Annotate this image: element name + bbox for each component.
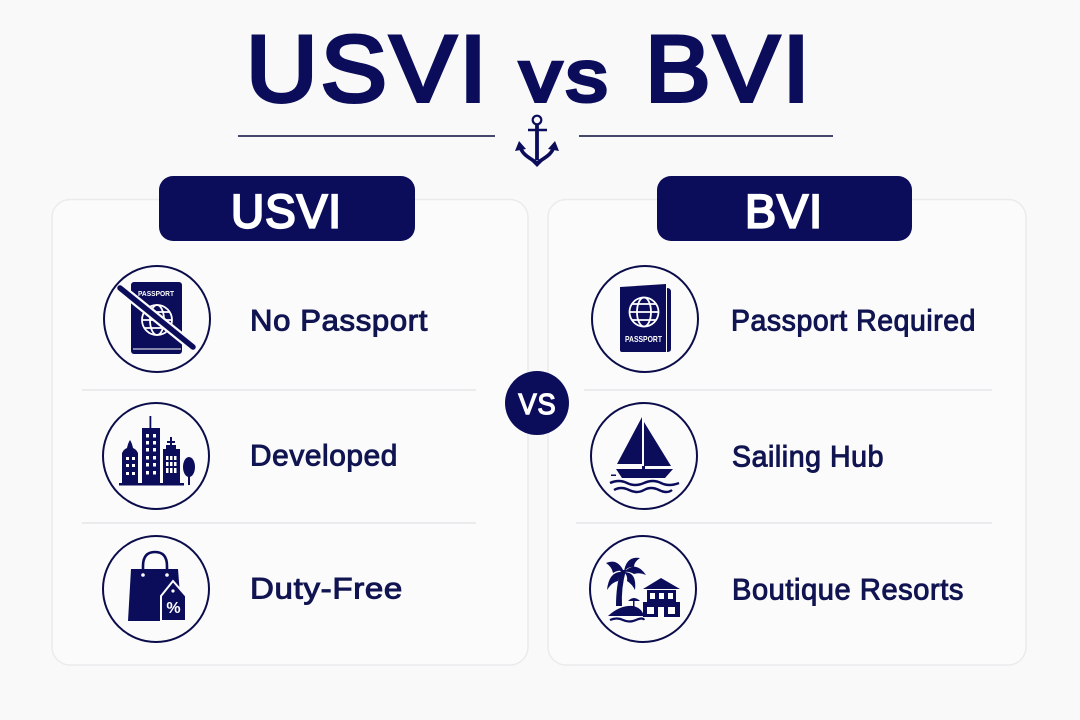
- label: No Passport: No Passport: [250, 304, 428, 338]
- USVI header pill: USVI: [231, 184, 342, 238]
- label: Duty-Free: Duty-Free: [250, 572, 403, 606]
- panel: BVI: [548, 176, 1026, 665]
- VS badge: [505, 371, 569, 435]
- icon: city buildings: [103, 403, 209, 509]
- title: BVI: [645, 16, 813, 121]
- icon: palm island and resort: [590, 536, 696, 642]
- label: Boutique Resorts: Boutique Resorts: [732, 574, 964, 606]
- label: Passport Required: Passport Required: [731, 304, 976, 338]
- title: USVI: [246, 16, 490, 121]
- label: Developed: Developed: [250, 440, 398, 472]
- icon: crossed-out passport: PASSPORT: [138, 289, 174, 298]
- BVI header pill: BVI: [745, 184, 823, 238]
- VS badge: VS: [518, 389, 556, 421]
- title: [246, 16, 813, 121]
- icon: shopping bag with tag: [103, 536, 209, 642]
- icon: passport: [592, 266, 698, 372]
- title: vs: [520, 37, 612, 117]
- icon: crossed-out passport: [104, 266, 210, 372]
- USVI header pill: [159, 176, 415, 241]
- icon: anchor: [515, 116, 559, 167]
- label: Sailing Hub: Sailing Hub: [732, 440, 884, 474]
- panel: USVI: [52, 176, 528, 665]
- icon: passport: PASSPORT: [625, 334, 663, 344]
- icon: shopping bag with tag: %: [166, 600, 181, 617]
- title divider with anchor: [238, 116, 833, 167]
- icon: sailboat: [591, 403, 697, 509]
- BVI header pill: [657, 176, 912, 241]
